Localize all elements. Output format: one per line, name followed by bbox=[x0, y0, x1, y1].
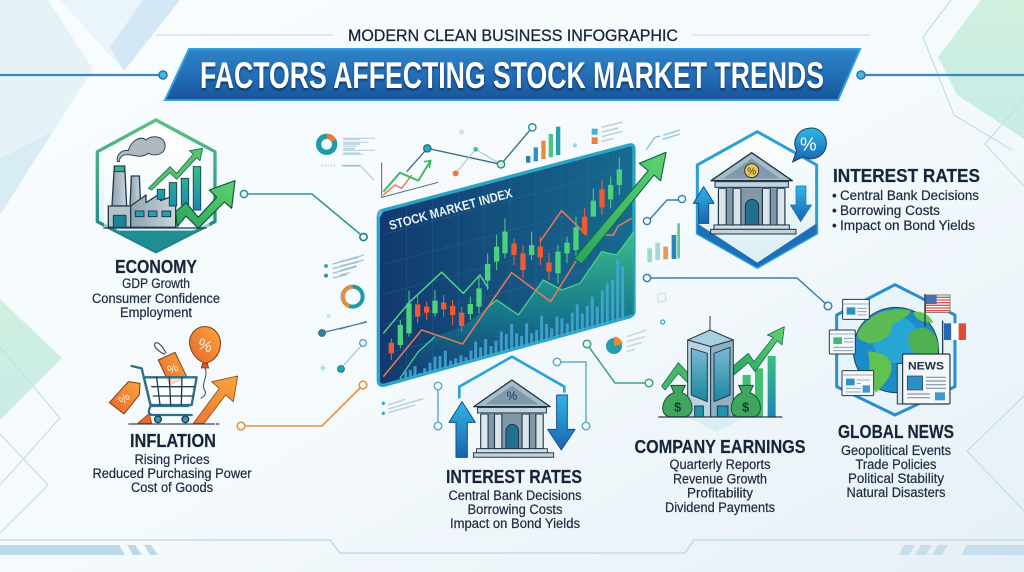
hexagon bbox=[97, 120, 215, 252]
connector: economy bbox=[240, 190, 367, 241]
panel label: STOCK MARKET INDEX bbox=[387, 185, 514, 233]
connector: global news bbox=[643, 274, 832, 310]
connector: right top bbox=[643, 195, 686, 225]
global news text: Geopolitical Events bbox=[841, 443, 951, 458]
interest rates text bottom: Central Bank Decisions bbox=[448, 488, 582, 503]
inflation text: INFLATION bbox=[130, 431, 216, 451]
bars bbox=[743, 368, 763, 417]
interest rates text right: • bbox=[832, 218, 837, 233]
area chart outline bbox=[400, 232, 634, 378]
subtitle: MODERN CLEAN BUSINESS INFOGRAPHIC bbox=[348, 27, 678, 45]
connector: inflation bbox=[237, 381, 367, 430]
company earnings text: Profitability bbox=[687, 486, 753, 500]
dollar signs bbox=[674, 400, 749, 414]
header line left bbox=[0, 71, 167, 79]
company earnings text: Dividend Payments bbox=[665, 500, 775, 515]
mini pie bbox=[606, 330, 647, 354]
network line bbox=[407, 124, 577, 176]
interest rates icon right bbox=[693, 128, 826, 267]
dollar signs: $ bbox=[742, 400, 749, 414]
global news text bbox=[838, 422, 954, 500]
economy text: Employment bbox=[120, 305, 192, 320]
inflation text: Cost of Goods bbox=[131, 480, 213, 495]
seal: % bbox=[747, 166, 756, 177]
mini donut bbox=[343, 287, 363, 307]
volume bars bbox=[401, 260, 623, 380]
interest rates text bottom bbox=[446, 467, 582, 531]
hexagon bbox=[697, 132, 817, 267]
company earnings text: Revenue Growth bbox=[673, 472, 767, 486]
connector: company earnings bbox=[583, 340, 653, 387]
economy text: GDP Growth bbox=[122, 276, 190, 291]
global news text: Natural Disasters bbox=[846, 485, 946, 500]
rising arrow bbox=[138, 376, 238, 423]
company earnings text: Quarterly Reports bbox=[670, 457, 771, 472]
small top donut and legend near economy bbox=[319, 136, 360, 318]
economy text bbox=[92, 257, 220, 320]
up arrow bbox=[693, 187, 714, 223]
mini square and dot bbox=[658, 293, 666, 324]
interest rates text bottom: Borrowing Costs bbox=[468, 502, 563, 517]
panel grid bbox=[382, 149, 633, 378]
bank bbox=[473, 380, 554, 457]
left tag: % bbox=[116, 390, 133, 407]
interest rates text right: • bbox=[832, 188, 837, 203]
interest rates text right bbox=[832, 166, 980, 233]
global news text: Political Stability bbox=[848, 471, 944, 486]
company earnings text bbox=[634, 437, 806, 515]
global news text: GLOBAL NEWS bbox=[838, 422, 954, 442]
cloud bbox=[117, 137, 165, 162]
economy text: ECONOMY bbox=[115, 257, 197, 277]
area chart bbox=[383, 232, 634, 383]
news windows bbox=[829, 299, 874, 396]
connector: interest rates bbox=[434, 358, 590, 430]
big arrow bbox=[176, 181, 235, 228]
percent: % bbox=[507, 389, 518, 403]
money bags bbox=[663, 385, 760, 417]
header line right bbox=[857, 71, 1024, 79]
green trend line bbox=[383, 272, 488, 333]
balloon: % bbox=[195, 336, 215, 357]
inflation icon bbox=[109, 327, 238, 424]
newspaper: NEWS bbox=[908, 360, 944, 372]
small decorative charts around the panel bbox=[340, 122, 680, 354]
hexagon bbox=[837, 285, 955, 415]
US flag bbox=[925, 294, 950, 327]
mini bars bbox=[526, 127, 560, 163]
top tag: % bbox=[165, 360, 181, 377]
orange trend line bbox=[383, 211, 632, 377]
globe bbox=[853, 307, 939, 393]
company earnings icon bbox=[658, 316, 784, 433]
inflation text bbox=[92, 431, 252, 495]
big green arrow bbox=[574, 152, 666, 264]
text lines top left bbox=[342, 138, 375, 180]
economy text: Consumer Confidence bbox=[92, 291, 220, 306]
title banner bbox=[165, 49, 860, 100]
up arrow bbox=[449, 402, 475, 457]
right arrow bbox=[733, 327, 784, 375]
percent bubble: % bbox=[800, 134, 817, 155]
interest rates text bottom: Impact on Bond Yields bbox=[450, 516, 580, 531]
company earnings text: COMPANY EARNINGS bbox=[634, 437, 806, 457]
economy icon bbox=[97, 120, 235, 252]
down arrow bbox=[790, 186, 812, 222]
bars bbox=[157, 167, 201, 210]
inflation text: Rising Prices bbox=[134, 452, 210, 467]
left arrow bbox=[662, 363, 690, 390]
down arrow bbox=[548, 395, 575, 450]
bank bbox=[711, 153, 796, 234]
connector: small left links bbox=[319, 322, 367, 372]
interest rates text right: Borrowing Costs bbox=[840, 203, 940, 218]
mini text lines left bbox=[340, 255, 367, 329]
French flag bbox=[943, 321, 966, 355]
inflation text: Reduced Purchasing Power bbox=[92, 466, 252, 481]
mini line chart bbox=[382, 161, 438, 197]
tower bbox=[688, 316, 733, 417]
mini legend bbox=[592, 122, 623, 144]
global news text: Trade Policies bbox=[856, 457, 937, 472]
thin arrow bbox=[148, 148, 203, 190]
interest rates text right: Central Bank Decisions bbox=[840, 188, 979, 203]
stock market panel bbox=[378, 145, 666, 385]
dollar signs: $ bbox=[674, 400, 681, 414]
mini right bars bbox=[647, 223, 680, 262]
interest rates text right: INTEREST RATES bbox=[833, 166, 980, 186]
interest rates icon bottom bbox=[382, 357, 575, 457]
roof hexagon outline bbox=[459, 357, 564, 398]
factory bbox=[112, 166, 127, 206]
candle bodies bbox=[391, 169, 619, 353]
small lines bbox=[382, 399, 423, 415]
interest rates text bottom: INTEREST RATES bbox=[446, 467, 582, 487]
interest rates text right: Impact on Bond Yields bbox=[840, 218, 975, 233]
global news icon bbox=[829, 285, 966, 415]
cart bbox=[132, 366, 197, 423]
mini top right link bbox=[646, 130, 680, 150]
interest rates text right: • bbox=[832, 203, 837, 218]
candle wicks bbox=[391, 157, 619, 360]
